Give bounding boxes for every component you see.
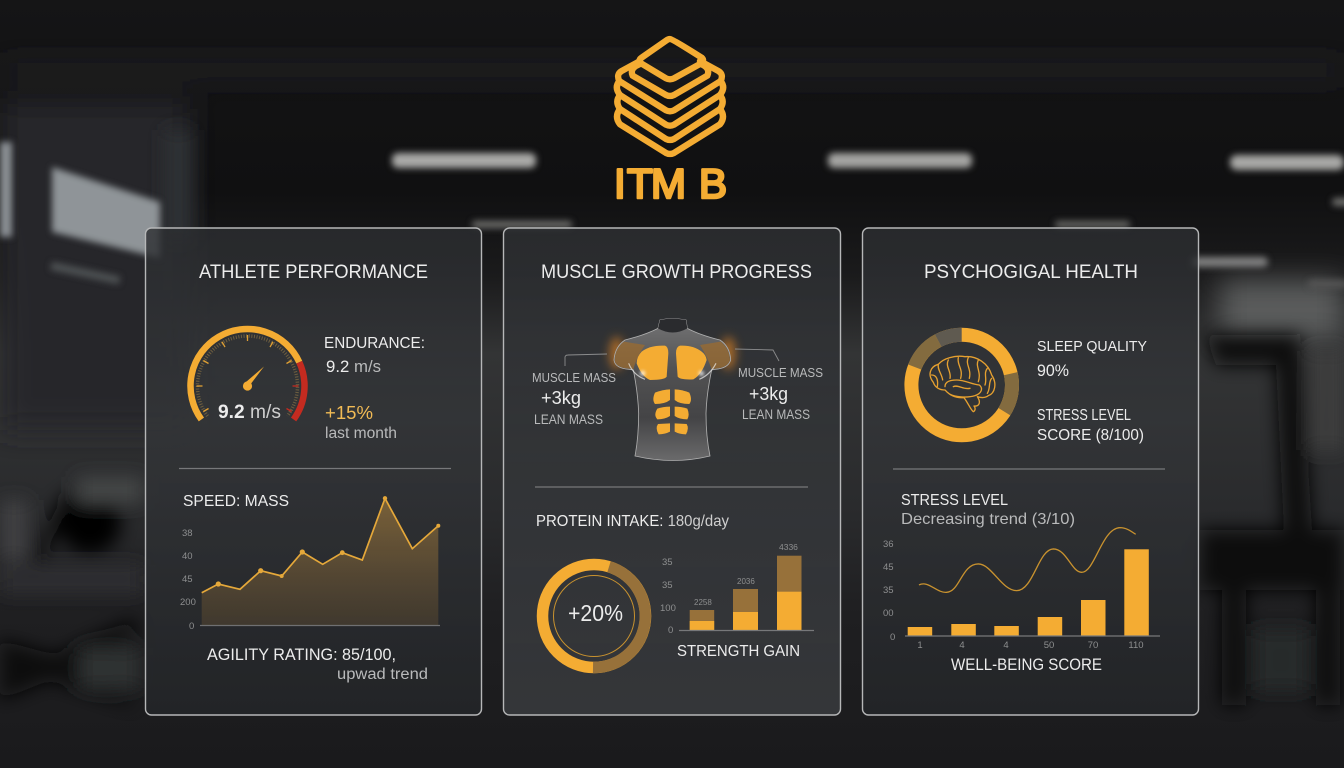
combo chart: well-being: 4 [959,640,965,651]
heading: psychogigal health: PSYCHOGIGAL HEALTH [924,262,1138,283]
monthly change: +15% [325,403,373,423]
callout: left muscle mass: +3kg [541,388,581,408]
callout: left muscle mass: LEAN MASS [534,412,603,427]
combo chart: well-being: 36 [883,539,894,550]
sleep quality stat: 90% [1037,361,1069,380]
sleep quality stat [1037,338,1147,380]
combo chart: well-being: WELL-BEING SCORE [951,656,1102,674]
logo wordmark: T [627,160,653,207]
gauge [190,329,304,423]
area chart: 40 [182,551,193,562]
combo chart: well-being [883,528,1160,674]
callout: right muscle mass: +3kg [749,384,788,404]
subheading: speed mass: SPEED: MASS [183,493,289,510]
endurance stat [324,335,425,376]
combo chart: well-being: 110 [1128,640,1144,651]
callout: right muscle mass: LEAN MASS [742,407,810,422]
bar chart: strength gain: 35 [662,557,673,568]
combo chart: well-being: 35 [883,585,894,596]
stress score stat [1037,407,1144,444]
area chart: 38 [182,528,193,539]
monthly change: last month [325,425,397,442]
icon: stacked layers [617,39,723,154]
logo wordmark: B [699,160,727,207]
bar chart: strength gain: 35 [662,580,673,591]
combo chart: well-being: 0 [890,632,895,643]
stress score stat: STRESS LEVEL [1037,407,1131,424]
area chart: 45 [182,574,193,585]
combo chart: well-being: 1 [917,640,923,651]
agility caption [207,646,428,683]
panel: psychological health [862,228,1198,715]
gauge: 9.2 m/s [218,402,281,423]
bar chart: strength gain: 2258 [694,598,712,607]
bar chart: strength gain: 2036 [737,577,755,586]
stress score stat: SCORE (8/100) [1037,427,1144,444]
agility caption: upwad trend [337,666,428,683]
subheading: protein intake: PROTEIN INTAKE: 180g/day [536,513,729,530]
callout: right muscle mass: MUSCLE MASS [738,365,823,380]
donut: sleep [911,335,1012,435]
monthly change [325,403,397,442]
endurance stat: 9.2 m/s [326,357,381,376]
donut: +20% [542,564,646,668]
combo chart: well-being: 00 [883,608,894,619]
combo chart: well-being: 45 [883,562,894,573]
heading: athlete performance: ATHLETE PERFORMANCE [199,262,428,283]
area chart: 200 [180,597,196,608]
panel: athlete performance [146,228,482,715]
heading: muscle growth progress: MUSCLE GROWTH PROGRESS [541,262,812,283]
donut: +20%: +20% [568,600,623,626]
callout: left muscle mass [532,354,616,427]
agility caption: AGILITY RATING: 85/100, [207,646,396,664]
logo wordmark: I [614,160,626,207]
bar chart: strength gain: 0 [668,625,673,636]
area chart: 0 [189,621,194,632]
subheading: stress level: STRESS LEVEL [901,492,1008,509]
callout: right muscle mass [735,349,823,422]
combo chart: well-being: 50 [1044,640,1054,651]
subheading: stress level [901,492,1075,528]
bar chart: strength gain: STRENGTH GAIN [677,643,800,660]
icon: torso [609,319,736,460]
bar chart: strength gain: 4336 [779,542,798,552]
endurance stat: ENDURANCE: [324,335,425,352]
logo wordmark: M [651,160,686,207]
bar chart: strength gain [660,542,814,660]
combo chart: well-being: 70 [1088,640,1098,651]
icon: brain [930,356,995,412]
subheading: stress level: Decreasing trend (3/10) [901,511,1075,528]
sleep quality stat: SLEEP QUALITY [1037,338,1147,355]
bar chart: strength gain: 100 [660,603,676,614]
area chart [180,496,440,632]
callout: left muscle mass: MUSCLE MASS [532,370,616,385]
logo [614,39,727,207]
combo chart: well-being: 4 [1003,640,1009,651]
panel: muscle growth [504,228,840,715]
